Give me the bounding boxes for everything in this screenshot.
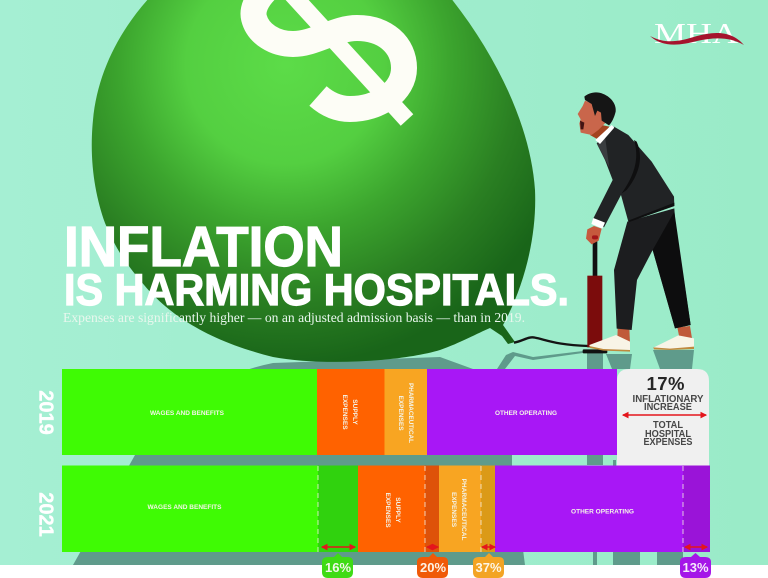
pill: 37% — [473, 553, 504, 578]
pill: 16%: 16% — [325, 560, 351, 575]
hose shadow — [497, 351, 583, 369]
title: INFLATION — [64, 215, 343, 279]
vest — [597, 137, 609, 167]
pump — [583, 237, 607, 353]
jacket — [593, 127, 674, 227]
bar 2021: PHARMACEUTICAL — [460, 478, 467, 541]
year label 2021: 2021 — [34, 492, 56, 537]
face — [578, 101, 607, 135]
mouth — [580, 121, 584, 129]
trousers — [614, 208, 691, 330]
bar 2021: WAGES AND BENEFITS — [148, 504, 222, 511]
title — [64, 215, 569, 315]
bar 2019: WAGES AND BENEFITS — [150, 410, 225, 417]
cuff — [591, 218, 605, 229]
balloon shadow — [73, 350, 694, 565]
bar 2019: EXPENSES — [341, 394, 348, 430]
callout: 17% inflationary increase — [617, 369, 709, 466]
logo: MHA: MHA — [654, 18, 738, 50]
year label 2019: 2019 — [34, 390, 56, 435]
callout: 17% inflationary increase: TOTAL — [653, 420, 683, 431]
dollar sign — [254, 0, 407, 120]
pill: 13% — [680, 553, 711, 578]
neck — [590, 125, 609, 141]
callout: 17% inflationary increase: HOSPITAL — [645, 429, 691, 440]
callout: 17% inflationary increase: EXPENSES — [644, 437, 693, 448]
pill: 16% — [322, 553, 353, 578]
pill: 20%: 20% — [420, 560, 446, 575]
callout: 17% inflationary increase: 17% — [646, 373, 684, 394]
balloon — [92, 0, 535, 362]
bar 2019: OTHER OPERATING — [495, 410, 557, 417]
bottom white strip — [0, 565, 768, 578]
shoes — [589, 335, 694, 350]
callout: 17% inflationary increase: INCREASE — [644, 402, 692, 413]
callout: 17% inflationary increase: INFLATIONARY — [632, 394, 704, 405]
bar 2021: EXPENSES — [384, 492, 391, 528]
subtitle: Expenses are significantly higher — on an adjusted admission basis — than in 2019. — [63, 310, 525, 325]
bar 2019: EXPENSES — [397, 395, 404, 431]
shirt collar — [595, 125, 614, 144]
hose — [514, 337, 588, 346]
title: IS HARMING HOSPITALS. — [64, 266, 569, 315]
hair — [584, 92, 616, 125]
pill: 20% — [417, 553, 448, 578]
hand — [586, 226, 602, 244]
ankles — [617, 326, 692, 343]
bar 2019 — [62, 369, 617, 455]
man shadow — [587, 350, 694, 565]
bar 2021: EXPENSES — [450, 492, 457, 528]
bar 2019: SUPPLY — [351, 399, 358, 425]
man pumping — [514, 92, 694, 353]
bar 2021: SUPPLY — [394, 497, 401, 523]
bar 2021: OTHER OPERATING — [571, 508, 634, 516]
bar 2021 — [62, 466, 710, 552]
pill: 37%: 37% — [475, 560, 502, 575]
delta arrows — [322, 546, 707, 548]
bar 2019: PHARMACEUTICAL — [407, 383, 414, 443]
arrow — [623, 414, 706, 416]
pill: 13%: 13% — [682, 560, 709, 575]
